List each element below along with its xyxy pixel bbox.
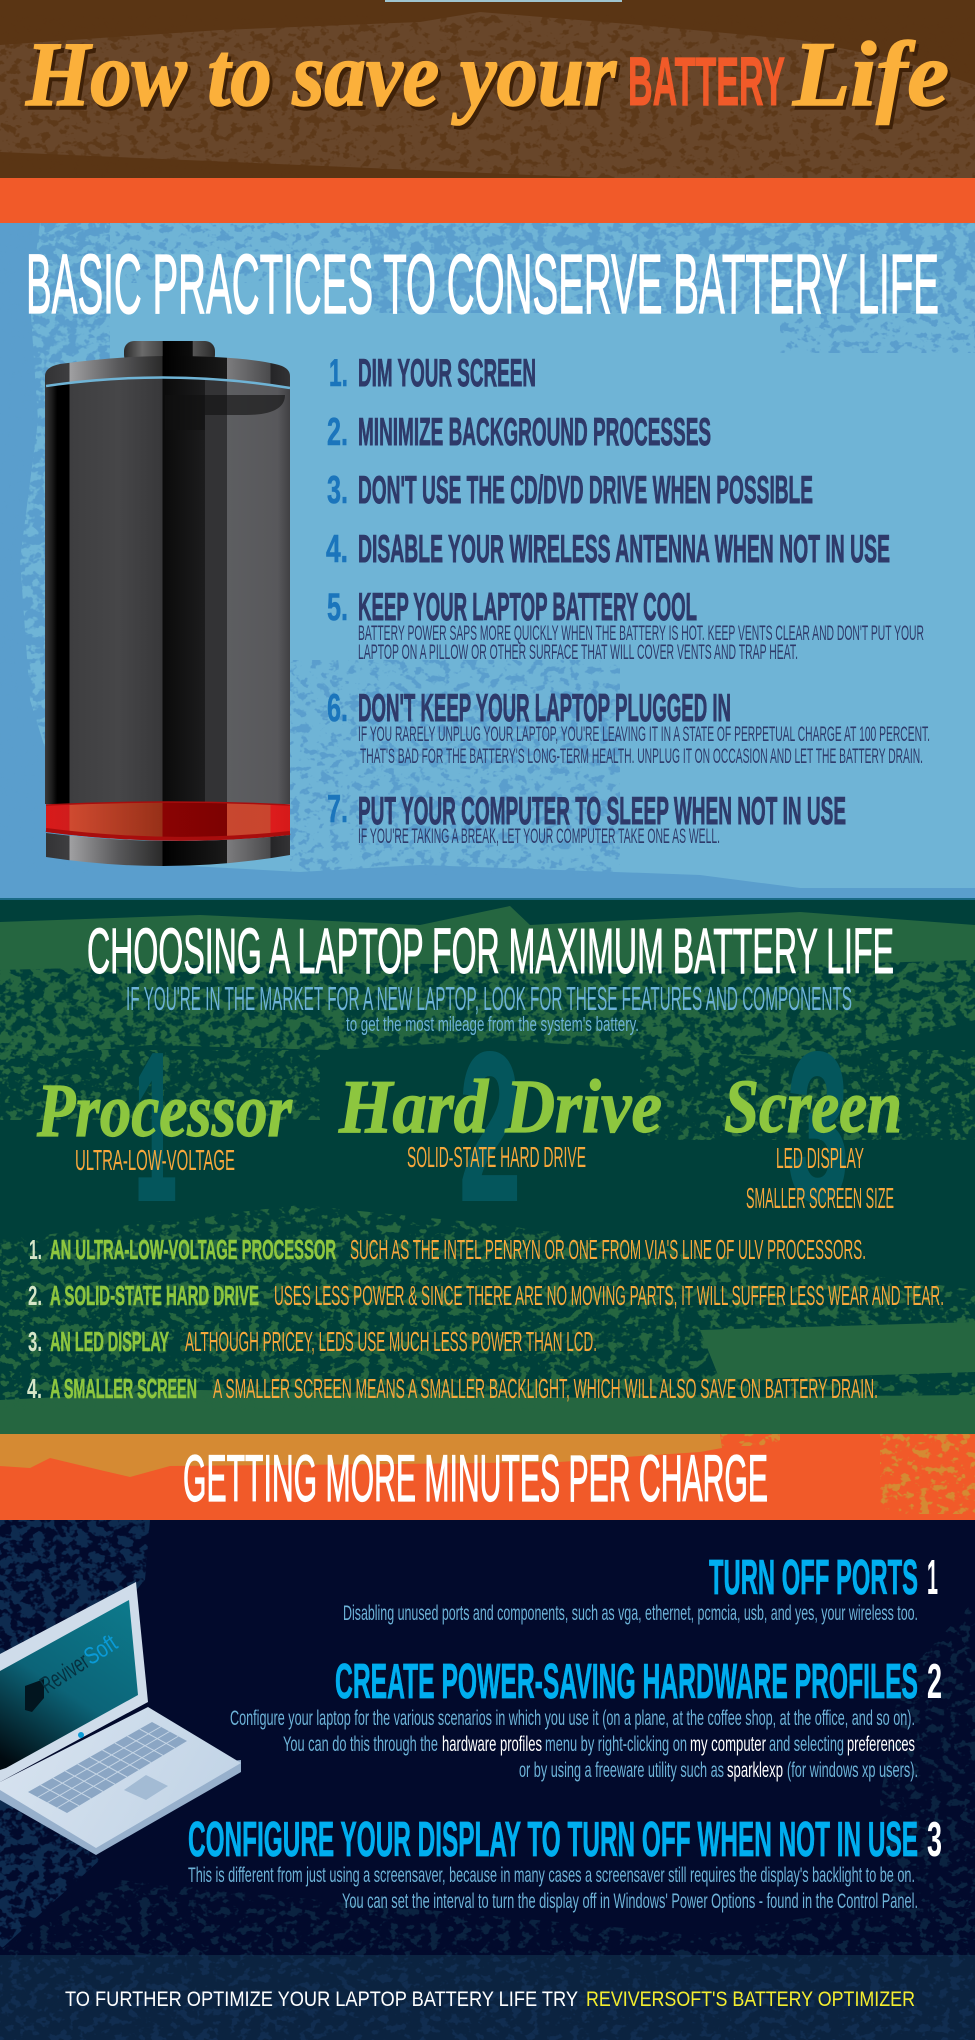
title: How to save your (25, 23, 617, 125)
feature 3: AN LED DISPLAY (50, 1326, 169, 1357)
feature 4: A SMALLER SCREEN (50, 1373, 197, 1404)
tip 1 (343, 1551, 938, 1625)
subheading: to get the most mileage from the system's battery. (346, 1014, 639, 1036)
item 3: 3. (327, 469, 348, 512)
footer call to action: REVIVERSOFT'S BATTERY OPTIMIZER (586, 1988, 915, 2011)
list: laptop features (27, 1234, 944, 1404)
item 1: 1. (329, 352, 348, 395)
feature 3: 3. (28, 1326, 42, 1357)
title: Life (795, 27, 952, 129)
tip 2: preferences (847, 1733, 915, 1756)
feature 4: 4. (27, 1373, 42, 1404)
title: BATTERY (628, 43, 785, 120)
tip 2: 2 (927, 1655, 942, 1709)
logo: ReviverSoft: Reviver (36, 1648, 94, 1699)
logo: ReviverSoft: Soft (79, 1629, 123, 1671)
panel: tips: 1 (927, 1551, 938, 1605)
column: processor: ULTRA-LOW-VOLTAGE (75, 1145, 235, 1177)
column: screen: LED DISPLAY (776, 1143, 864, 1175)
panel: tips (0, 1520, 975, 2040)
footer band (0, 1955, 975, 2040)
tip 2: You can do this through the (283, 1733, 438, 1756)
item 1 (329, 352, 536, 395)
feature 3 (28, 1326, 597, 1357)
feature 1: 1. (29, 1234, 42, 1265)
big numerals: 1 (134, 1008, 177, 1245)
column: hard drive: SOLID-STATE HARD DRIVE (407, 1142, 586, 1174)
panel: choosing a laptop (0, 900, 975, 1434)
title: Life (792, 23, 949, 125)
tip 2: my computer (690, 1733, 766, 1756)
item 7: 7. (327, 788, 348, 831)
item 4: 4. (326, 528, 348, 571)
panel: basic practices (0, 223, 975, 900)
list: seven practices (326, 352, 930, 848)
column: processor (36, 1069, 293, 1177)
title: How to save your (28, 27, 620, 129)
item 2 (327, 411, 711, 454)
tip 2: hardware profiles (442, 1733, 542, 1756)
footer call to action (65, 1988, 915, 2011)
list: seven practices: DIM YOUR SCREEN (358, 352, 536, 395)
panel: header (0, 0, 975, 178)
feature 1: AN ULTRA-LOW-VOLTAGE PROCESSOR (50, 1234, 336, 1265)
tip 3 (188, 1813, 942, 1913)
column: hard drive: Hard Drive (338, 1065, 662, 1149)
tip 2: sparklexp (727, 1759, 783, 1782)
icon: battery (45, 341, 290, 866)
item 5: 5. (327, 586, 348, 629)
item 2: 2. (327, 411, 348, 454)
feature 2: 2. (28, 1280, 42, 1311)
panel: getting more minutes banner (0, 1434, 975, 1520)
title (25, 23, 952, 129)
column: screen: Screen (724, 1065, 902, 1149)
icon: laptop (0, 1582, 241, 1855)
column: screen (724, 1065, 902, 1215)
column: processor: Processor (36, 1069, 293, 1153)
item 6: 6. (327, 687, 348, 730)
feature 2: A SOLID-STATE HARD DRIVE (50, 1280, 259, 1311)
item 5 (327, 586, 924, 664)
big numerals (134, 1008, 849, 1245)
footer call to action: TO FURTHER OPTIMIZE YOUR LAPTOP BATTERY LIFE TRY (65, 1988, 578, 2011)
tip 2 (230, 1655, 942, 1782)
subheading (126, 980, 852, 1036)
big numerals: 3 (787, 1008, 849, 1245)
tip 2: or by using a freeware utility such as (519, 1759, 724, 1782)
item 7 (327, 788, 846, 848)
tip 2: and selecting (769, 1733, 844, 1756)
tip 2: menu by right-clicking on (545, 1733, 687, 1756)
orange band (0, 178, 975, 223)
feature 1 (29, 1234, 866, 1265)
big numerals: 2 (459, 1008, 521, 1245)
item 6 (327, 687, 930, 768)
tip 3: 3 (927, 1813, 942, 1867)
